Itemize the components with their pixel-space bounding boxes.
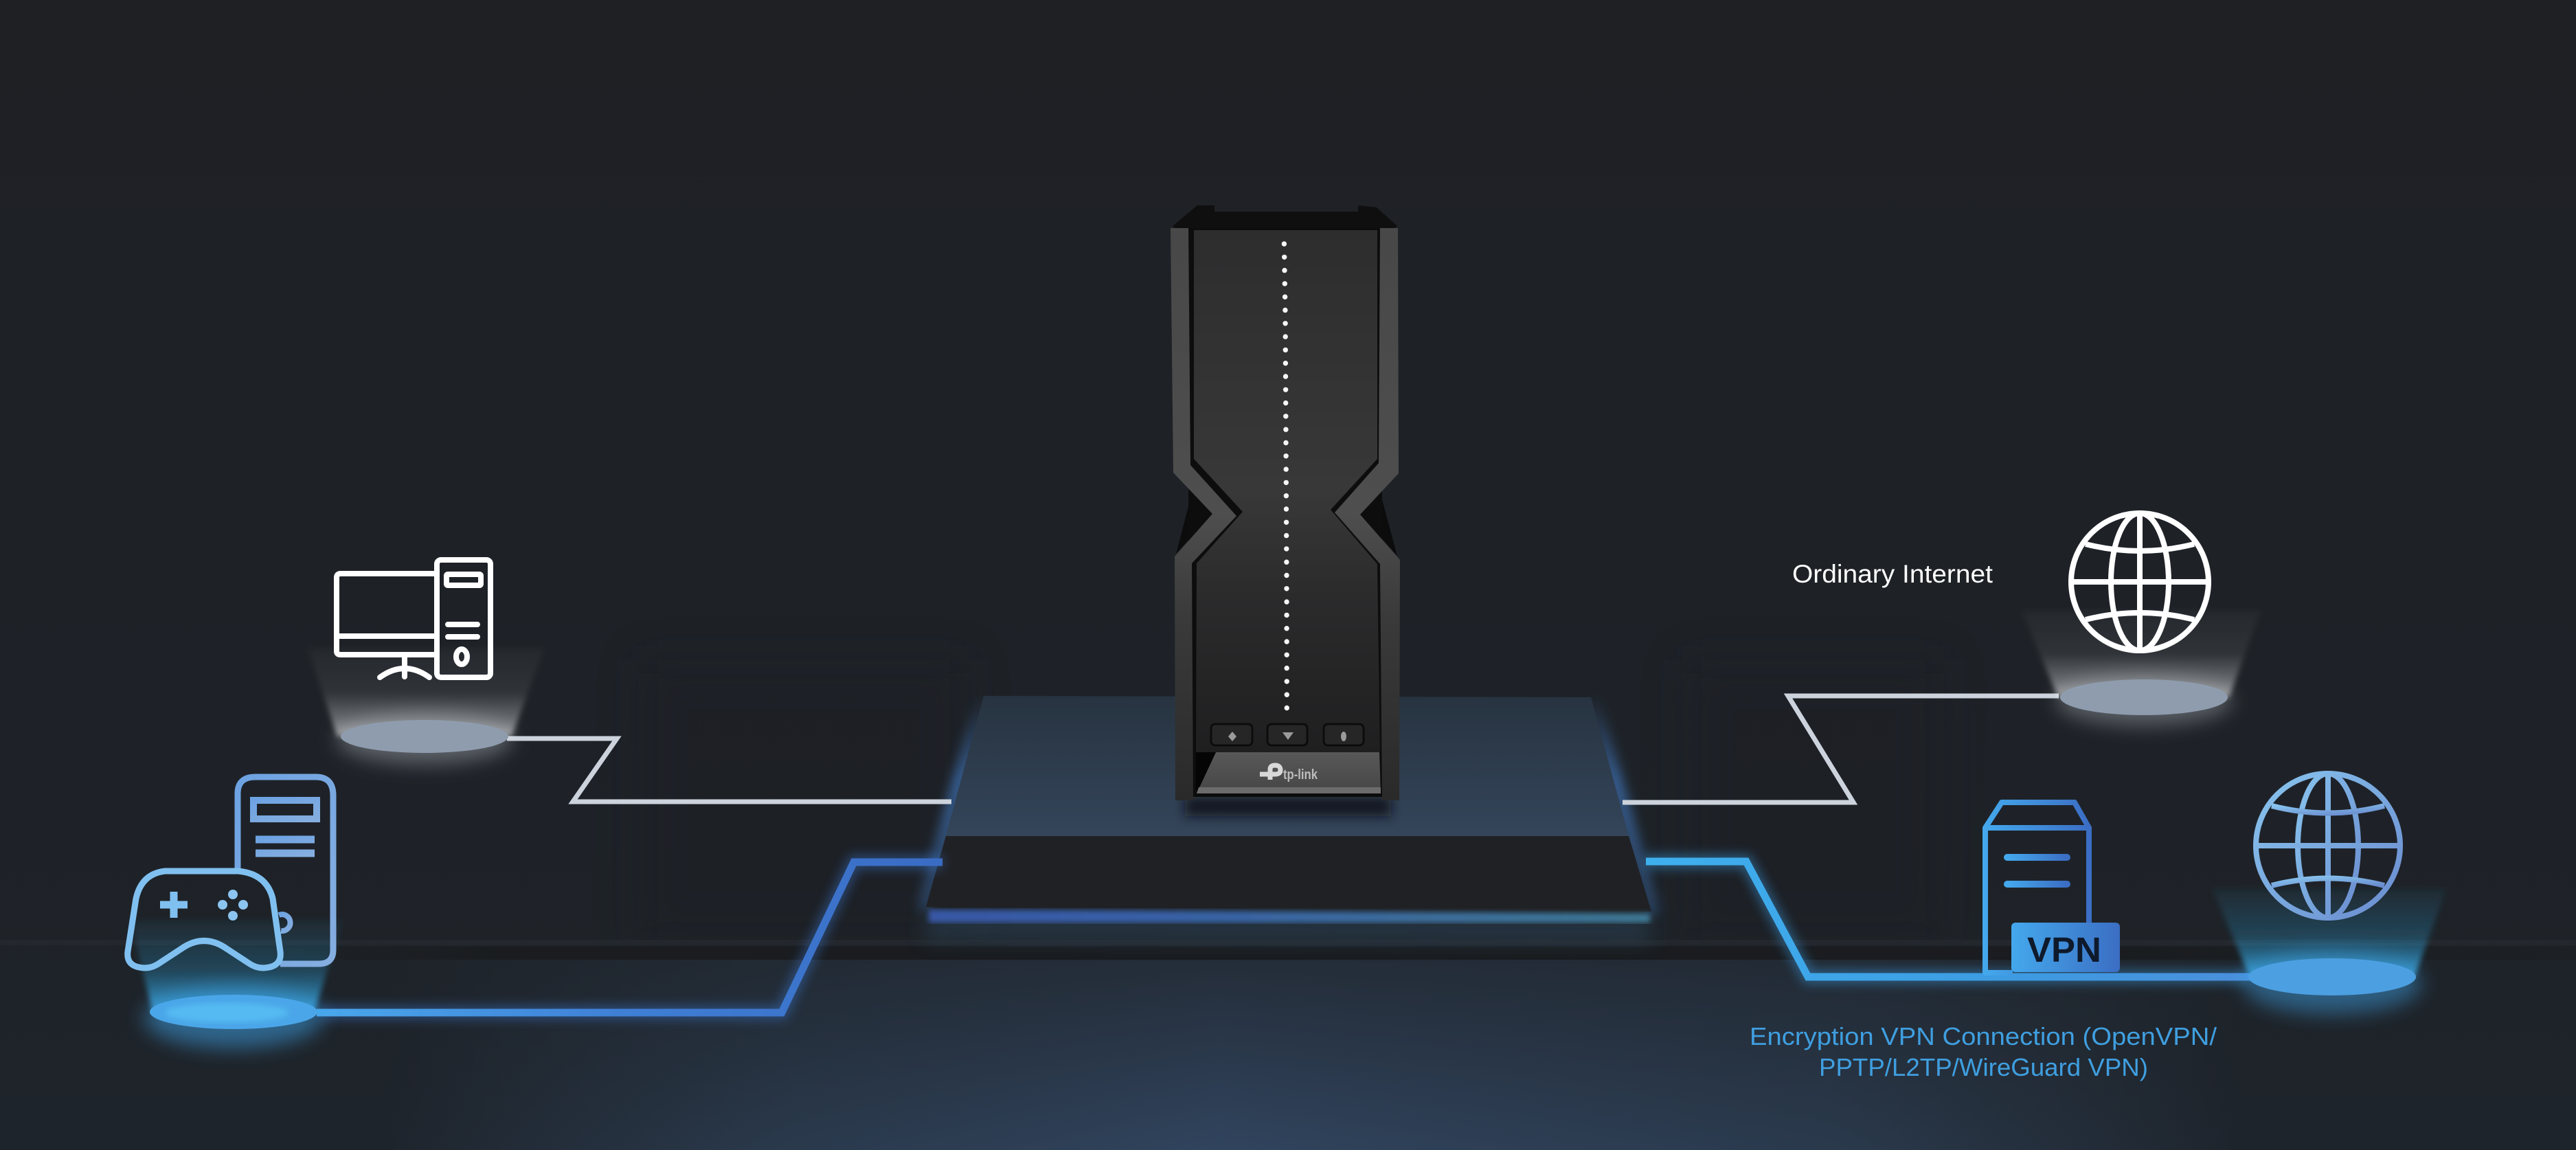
gaming pad highlight	[165, 1003, 289, 1022]
icon: game controller	[128, 871, 280, 968]
PC light beam	[308, 649, 544, 736]
icon: desktop computer	[337, 560, 490, 677]
pedestal wide underglow	[924, 914, 1652, 943]
logo plate left recess	[1196, 752, 1216, 790]
device: gaming group	[128, 777, 342, 1048]
internet light beam	[2022, 611, 2261, 697]
device: VPN internet group	[2213, 774, 2446, 1014]
router buttons	[1211, 724, 1364, 745]
plate base line	[1195, 793, 1382, 797]
internet pad glow	[2056, 676, 2232, 725]
icon: server body	[1985, 802, 2089, 973]
connection line: VPN right	[1646, 861, 2252, 977]
pedestal blue underglow	[929, 910, 1650, 923]
pedestal front face	[926, 836, 1651, 912]
gaming light beam	[131, 921, 342, 1012]
caption: VPN connection	[1750, 1022, 2217, 1081]
connection line: ordinary left	[507, 739, 951, 802]
pedestal top surface	[946, 696, 1629, 836]
icon: blue globe	[2256, 774, 2400, 918]
VPN internet pad	[2248, 958, 2416, 995]
internet pad	[2060, 679, 2228, 715]
logo plate lower lip	[1197, 787, 1381, 793]
router	[1171, 205, 1400, 816]
tp-link wordmark: tp-link	[1283, 767, 1318, 782]
device: VPN server	[1985, 802, 2120, 973]
button icons	[1228, 732, 1346, 741]
router right column	[1335, 228, 1400, 800]
router back wings	[1176, 493, 1212, 554]
LED strip	[1282, 241, 1289, 710]
caption: VPN connection: Encryption VPN Connection (OpenVPN/	[1750, 1022, 2217, 1050]
router face panel	[1194, 230, 1380, 752]
icon: white globe	[2071, 513, 2208, 651]
device: PC group	[308, 560, 544, 764]
router shadow	[1185, 797, 1391, 816]
icon: gaming tower	[238, 777, 333, 964]
VPN internet beam	[2213, 889, 2446, 977]
pedestal platform	[924, 696, 1653, 943]
connection line: VPN left	[317, 862, 942, 1013]
VPN internet pad glow	[2243, 954, 2421, 1014]
VPN badge text: VPN	[2027, 930, 2101, 969]
PC pad	[341, 720, 508, 753]
logo plate	[1197, 752, 1381, 793]
pedestal edge glow	[924, 696, 1653, 915]
device: ordinary internet group	[1792, 513, 2261, 725]
router left column	[1171, 228, 1236, 800]
connection line: ordinary right	[1623, 696, 2059, 802]
PC pad glow	[337, 714, 512, 764]
router inner frame	[1188, 228, 1382, 797]
label: ordinary internet: Ordinary Internet	[1792, 560, 1993, 588]
VPN badge	[2011, 923, 2120, 972]
gaming pad	[150, 995, 317, 1029]
router top cap	[1173, 205, 1397, 234]
caption: VPN connection: PPTP/L2TP/WireGuard VPN)	[1819, 1053, 2148, 1081]
tp-link logo mark	[1260, 765, 1280, 780]
gaming pad glow	[144, 988, 323, 1048]
